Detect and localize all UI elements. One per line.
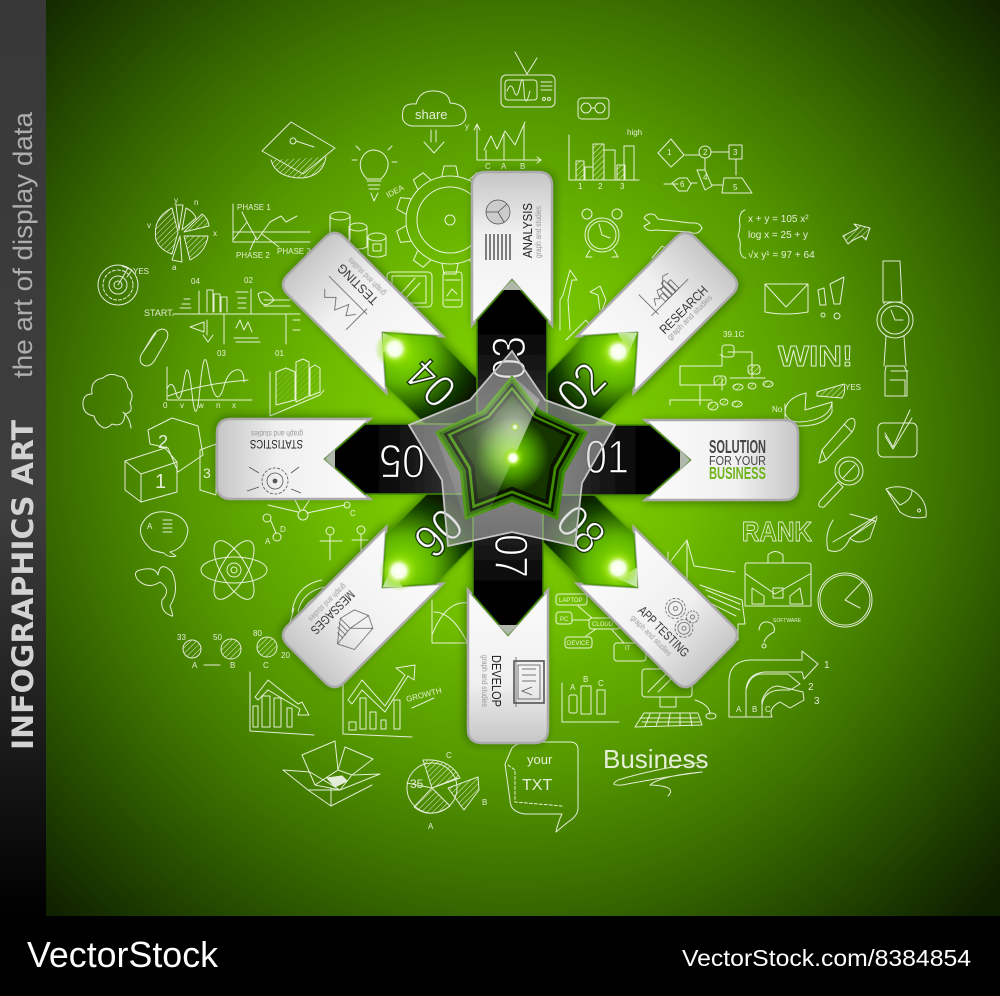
sketch: equations: x + y = 105 x² <box>748 214 809 225</box>
sketch: line chart top: B <box>520 162 525 171</box>
sketch: start timeline: START. <box>144 308 174 318</box>
sketch: wall clock <box>818 573 872 627</box>
sketch: speech bubble left: A <box>147 522 153 531</box>
ribbon 07 icon <box>514 657 544 707</box>
ribbon 04 title: TESTING <box>334 261 381 308</box>
sketch: start timeline <box>144 276 300 358</box>
ribbon 01 heading: FOR YOUR <box>709 453 766 468</box>
sketch: three bars chart: B <box>583 675 588 684</box>
sketch: flowchart top right: 6 <box>680 180 685 189</box>
ribbon 06 title: MESSAGES <box>308 587 358 638</box>
sketch: device flowchart: IT <box>625 646 631 652</box>
sketch: question mark: SOFTWARE <box>773 618 802 624</box>
sketch: 3D pie: YES <box>845 383 861 392</box>
sketch: pencil <box>819 418 855 463</box>
ribbon 06: messages <box>278 432 538 692</box>
ribbon 05 tip <box>325 449 335 469</box>
sketch: wave chart: n <box>216 401 220 410</box>
sketch: clover <box>83 374 132 428</box>
sketch: light bulb <box>352 146 406 201</box>
sketch: flowchart top right: 5 <box>733 183 738 192</box>
ribbon 04 number: 04 <box>396 348 466 418</box>
sketch: flowchart top right: 2 <box>703 148 708 157</box>
sketch: your TXT bubble: your <box>527 752 553 767</box>
ribbon 02 title: RESEARCH <box>656 283 711 337</box>
sketch: three-way arrow: 2 <box>808 682 814 693</box>
ribbon 03 panel <box>472 172 552 325</box>
sketch: down arrow chart <box>250 672 314 735</box>
sketch: mouse <box>886 487 926 518</box>
ribbon 02 subtitle: graph and studies <box>666 293 714 342</box>
sketch: network nodes: D <box>280 525 286 534</box>
sketch: number cubes: 1 <box>155 471 166 493</box>
sketch: network nodes <box>263 490 356 541</box>
sketch: phase line chart: PHASE 3 <box>277 247 311 256</box>
sketch: your TXT bubble <box>505 742 578 832</box>
ribbon 08 panel <box>577 527 742 692</box>
sketch: number three <box>135 567 176 616</box>
ribbon 07: develop <box>468 455 548 743</box>
ribbon 04 subtitle: graph and studies <box>346 256 388 297</box>
sketch: line chart top: C <box>485 162 491 171</box>
ribbon 01 tip <box>680 450 690 470</box>
sketch: three bars chart: A <box>570 683 576 692</box>
sidebar tagline: the art of display data <box>8 111 38 378</box>
sketch: WIN text: WIN! <box>778 341 853 373</box>
sketch: equations: √x y¹ = 97 + 64 <box>748 249 815 261</box>
ribbon 03 tip <box>502 280 522 290</box>
ribbon 05 number: 05 <box>379 435 425 488</box>
ribbon 02 icon <box>634 262 691 319</box>
sketch: network nodes: C <box>350 509 356 518</box>
sketch: your TXT bubble: TXT <box>522 777 552 794</box>
central star <box>409 351 615 546</box>
ribbon 08 title: APP TESTING <box>635 603 692 660</box>
ribbon 04 icon <box>311 273 370 333</box>
ribbon 08 arrow <box>485 435 662 612</box>
sketch: wifi arcs <box>288 580 326 630</box>
sketch: television <box>501 52 555 107</box>
translucent outer star <box>409 351 615 546</box>
sketch: three-way arrow: C <box>765 705 771 714</box>
sketch: three bars chart <box>562 675 619 722</box>
central background glow <box>290 230 730 670</box>
sketch: flowchart top right <box>658 139 752 193</box>
sketch: three-way arrow: B <box>752 705 757 714</box>
ribbon 01: solution <box>510 420 798 500</box>
sketch: start timeline: 03 <box>217 349 226 358</box>
sketch: bar chart hatch: high <box>627 128 642 137</box>
sketch: open box <box>283 741 380 806</box>
sketch: tablet and phone <box>387 272 462 307</box>
sketch: flowchart top right: 4 <box>703 173 708 182</box>
sketch: share cloud: share <box>415 107 448 122</box>
sketch: small pies: 80 <box>253 629 262 638</box>
ribbon 05 subtitle: graph and studies <box>251 429 303 438</box>
sketch: exploded pie 35: C <box>446 751 452 760</box>
ribbon 08: app testing <box>482 432 742 692</box>
sketch: growth label: GROWTH <box>405 686 443 704</box>
sketch: three-way arrow: 1 <box>824 660 830 671</box>
ribbon 02 panel <box>577 228 742 393</box>
sketch: line chart top <box>465 122 541 171</box>
sketch: Business handwriting: Business <box>603 744 708 774</box>
star centre glow <box>502 447 524 469</box>
sketch: exclamation marks <box>818 277 844 319</box>
ribbon 08 number: 08 <box>546 494 616 564</box>
sketch: number cubes <box>125 418 216 502</box>
sketch: bar chart hatch: 2 <box>598 182 603 191</box>
sketch: Business handwriting <box>603 744 708 796</box>
sketch: device flowchart: CLOUD <box>592 622 614 628</box>
ribbon 04 glow <box>366 321 423 377</box>
sketch: wrist watch <box>877 261 913 396</box>
sketch: exploded pie chart: a <box>172 263 177 272</box>
ribbon 04 tip <box>373 327 403 357</box>
ribbon 06 number: 06 <box>404 498 474 568</box>
sketch: wave chart: x <box>232 401 236 410</box>
sketch: wave chart: v <box>180 401 184 410</box>
ribbon 03 title: ANALYSIS <box>520 203 535 258</box>
sketch: wave chart <box>163 360 252 411</box>
sketch: triangle chart <box>660 540 735 578</box>
sketch: small pies: 20 <box>281 651 290 660</box>
sketch: magnifier <box>819 457 863 507</box>
ribbon 03 number: 03 <box>482 336 535 380</box>
ribbon 03 icons <box>486 200 510 260</box>
sketch: gear <box>396 166 504 274</box>
sketch: check box <box>878 410 917 457</box>
ribbon 02 number: 02 <box>546 352 616 422</box>
star light slice <box>435 375 540 520</box>
sketch: small pies: A <box>192 661 198 670</box>
sketch: exploded pie chart: x <box>213 229 217 238</box>
ribbon 02 arrow <box>485 308 662 485</box>
sketch: exploded pie 35 <box>407 751 487 831</box>
sketch: hierarchy <box>670 330 773 410</box>
ribbon 02: research <box>482 228 742 488</box>
ribbon 05 title: STATISTICS <box>250 437 303 451</box>
sketch: bar chart hatch <box>569 128 642 191</box>
sketch: line chart top: y <box>465 122 469 131</box>
sketch: 3D pie: No <box>772 405 783 414</box>
sketch: device flowchart: DEVICE <box>567 641 589 647</box>
sketch: target: YES <box>133 267 149 276</box>
sketch: small pies: 33 <box>177 633 186 642</box>
sketch: target <box>98 265 149 305</box>
sketch: exploded pie chart: v <box>147 221 151 230</box>
sketch: briefcase <box>745 552 811 606</box>
sidebar title: INFOGRAPHICS ART <box>6 420 40 750</box>
sketch: exploded pie 35: A <box>428 822 434 831</box>
sketch: exploded pie chart: y <box>174 196 178 205</box>
ribbon 01 arrow <box>510 425 690 495</box>
sketch: goggles box <box>578 98 609 119</box>
sketch: exploded pie chart <box>147 196 217 272</box>
sketch: share cloud <box>402 91 466 153</box>
ribbon 08 subtitle: graph and studies <box>629 613 673 658</box>
sketch: device flowchart <box>556 594 646 661</box>
sketch: atom <box>201 535 267 605</box>
sketch: bar chart hatch: 3 <box>620 182 625 191</box>
sketch: three-way arrow: 3 <box>814 696 820 707</box>
sketch: equations <box>738 210 815 261</box>
ribbon 07 number: 07 <box>485 534 538 578</box>
doodle sketches <box>83 52 926 832</box>
ribbon 01 panel <box>645 420 798 500</box>
sketch: start timeline: 01 <box>275 349 284 358</box>
star upper highlight <box>510 422 520 432</box>
ribbon 05 arrow <box>325 424 505 494</box>
ribbon 04 arrow <box>358 308 535 485</box>
sketch: start timeline: 02 <box>244 276 253 285</box>
sketch: three-way arrow <box>729 651 830 717</box>
ribbon 04: testing <box>278 228 538 488</box>
sketch: upward arrows <box>560 270 606 360</box>
ribbon 04 panel <box>278 228 443 393</box>
footer brand: VectorStock <box>27 934 219 975</box>
sketch: start timeline: 04 <box>191 277 200 286</box>
ribbon 07 subtitle: graph and studies <box>480 655 489 707</box>
sketch: mini arrow <box>843 224 870 244</box>
sketch: glasses <box>827 514 877 552</box>
layered inner star <box>435 375 588 520</box>
ribbon 08 icon <box>656 593 704 641</box>
ribbon 07 title: DEVELOP <box>489 655 504 707</box>
ribbon 02 glow <box>590 324 646 380</box>
ribbon 02 tip <box>613 323 643 353</box>
sketch: number cubes: 3 <box>203 465 211 481</box>
ribbon 08 tip <box>617 563 647 593</box>
ribbon 06 arrow <box>358 435 535 612</box>
sketch: phase line chart: PHASE 1 <box>237 203 271 212</box>
sketch: hierarchy: 39.1C <box>723 330 745 339</box>
sketch: alarm clock <box>582 209 622 257</box>
sketch: wrench <box>644 214 702 233</box>
left sidebar <box>0 0 46 916</box>
ribbon 05 icon <box>247 467 301 494</box>
sketch: equations: log x = 25 + y <box>748 230 808 241</box>
ribbon 06 panel <box>278 527 443 692</box>
sketch: flowchart top right: 3 <box>733 148 738 157</box>
ribbon 07 arrow <box>473 455 543 635</box>
sketch: cross figures <box>265 526 368 560</box>
ribbon 06 glow <box>371 543 427 599</box>
ribbon 01 heading: BUSINESS <box>709 463 766 483</box>
sketch: computer and keyboard <box>635 669 716 727</box>
sketch: three bars chart: C <box>598 679 604 688</box>
ribbon 07 tip <box>498 625 518 635</box>
sketch: sine chart <box>432 600 468 643</box>
sketch: RANK outline text: RANK <box>742 516 812 547</box>
ribbon 06 tip <box>377 567 407 597</box>
ribbon 03 arrow <box>477 280 547 460</box>
ribbon 07 panel <box>468 590 548 743</box>
sketch: line chart top: A <box>501 162 507 171</box>
ribbon 05 panel <box>217 419 370 499</box>
sketch: small pies: 50 <box>213 633 222 642</box>
sketch: question mark <box>759 618 802 648</box>
sketch: wave chart: 0 <box>163 401 168 410</box>
sketch: envelope <box>765 284 808 314</box>
ribbon 03: analysis <box>472 172 552 460</box>
sketch: phase line chart <box>233 203 311 260</box>
sketch: speech bubble left <box>140 512 188 557</box>
sketch: up arrow chart <box>343 665 415 737</box>
sketch: flowchart top right: 1 <box>667 148 672 157</box>
sketch: cylinders <box>330 212 386 257</box>
black footer band <box>0 916 1000 996</box>
sketch: small pies: B <box>230 661 235 670</box>
ribbon 01 heading <box>709 437 766 483</box>
sketch: puzzle <box>652 246 734 300</box>
sketch: exploded pie 35: 35 <box>410 777 424 791</box>
sketch: device flowchart: PC <box>560 617 569 623</box>
sketch: small pies <box>177 629 290 670</box>
sketch: small pies: C <box>263 661 269 670</box>
sketch: light bulb: IDEA <box>385 183 406 200</box>
ribbon 08 glow <box>590 540 646 596</box>
ribbon 06 subtitle: graph and studies <box>306 582 348 623</box>
sketch: stacked books <box>700 585 745 640</box>
sketch: number cubes: 2 <box>158 432 168 452</box>
footer URL: VectorStock.com/8384854 <box>682 945 971 971</box>
ribbon 01 number: 01 <box>585 430 629 483</box>
sketch: device flowchart: LAPTOP <box>559 598 583 604</box>
ribbon 06 icon <box>326 603 378 655</box>
sketch: 3D pie <box>772 383 861 426</box>
sketch: bar chart hatch: 1 <box>578 182 583 191</box>
ribbon 01 heading: SOLUTION <box>709 437 766 457</box>
sketch: exploded pie 35: B <box>482 798 487 807</box>
sketch: paperclip <box>140 329 168 366</box>
sketch: wave chart: w <box>197 401 204 410</box>
sketch: phase line chart: PHASE 2 <box>236 251 270 260</box>
ribbon 05: statistics <box>217 419 505 499</box>
sketch: exploded pie chart: n <box>194 198 198 207</box>
sketch: graduation cap <box>262 122 335 178</box>
sketch: isometric bars <box>270 359 324 416</box>
sketch: cross figures: A <box>265 537 271 546</box>
ribbon 03 subtitle: graph and studies <box>534 206 543 258</box>
sketch: three-way arrow: A <box>736 705 742 714</box>
